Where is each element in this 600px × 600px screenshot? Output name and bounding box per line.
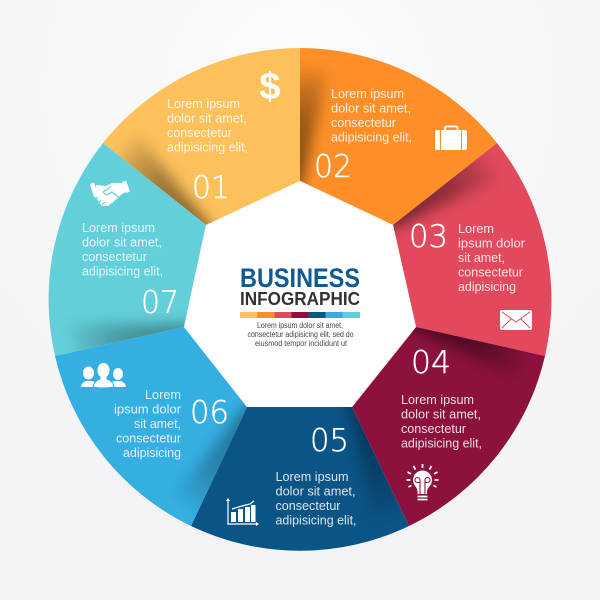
segment 03 [377,143,551,356]
text 05: dolor sit amet, [276,484,356,498]
numbers: 01 [192,170,230,206]
text 03: sit amet, [458,251,505,265]
text 04 [401,393,482,450]
text 07: adipisicing elit, [82,264,163,278]
icon: handshake [90,180,130,206]
numbers: 06 [190,395,229,431]
text 06 [114,388,181,460]
icon: briefcase [435,126,467,150]
text 02: dolor sit amet, [331,102,411,116]
colour stripe [240,312,360,318]
icon: people [81,363,126,388]
text 07: consectetur [82,250,147,264]
numbers: 04 [411,345,451,381]
segment 02 [285,48,497,225]
numbers: 07 [141,285,179,321]
segment 05 [191,407,409,551]
center description [248,321,354,348]
numbers: 03 [409,219,448,255]
numbers [141,149,451,459]
icon: light bulb [406,464,438,500]
text 01: consectetur [167,126,232,140]
icon: envelope [500,310,532,330]
center description: consectetur adipisicing elit, sed do [248,330,354,339]
segment 04 [352,310,545,526]
text 01: Lorem ipsum [167,97,240,111]
title [240,263,360,309]
text 06: Lorem [145,388,181,402]
text 07: dolor sit amet, [82,236,162,250]
text 02 [331,87,412,144]
text 03: adipisicing [458,280,516,294]
text 04: adipisicing elit, [401,436,482,450]
text 04: consectetur [401,422,466,436]
title: INFOGRAPHIC [240,288,360,309]
segment 06 [55,327,266,526]
text 05 [276,470,356,528]
text 07: Lorem ipsum [82,221,155,235]
text 06: consectetur [116,432,181,446]
text 01: adipisicing elit, [167,140,248,154]
title: BUSINESS [240,263,360,293]
icon: dollar: $ [259,66,281,108]
text 06: ipsum dolor [114,402,181,416]
text 04: Lorem ipsum [401,393,474,407]
segment 07 [49,143,206,366]
icon: bar chart [226,498,259,526]
text 07 [82,221,163,278]
numbers: 02 [314,149,352,185]
center heptagon [184,181,416,407]
segment 01 [103,48,300,243]
text 01: dolor sit amet, [167,112,247,126]
text 05: Lorem ipsum [276,470,348,484]
text 04: dolor sit amet, [401,408,481,422]
center description: eiusmod tempor incididunt ut [255,339,348,348]
text 02: Lorem ipsum [331,87,404,101]
text 02: consectetur [331,116,396,130]
text 06: sit amet, [134,417,181,431]
text 03 [458,222,525,294]
text 06: adipisicing [123,446,181,460]
numbers: 05 [310,423,349,459]
text 03: consectetur [458,266,523,280]
text 05: consectetur [276,499,340,513]
text 02: adipisicing elit, [331,130,412,144]
center description: Lorem ipsum dolor sit amet, [257,321,343,330]
text 01 [167,97,248,154]
text 05: adipisicing elit, [276,514,356,528]
text 03: Lorem [458,222,494,236]
text 03: ipsum dolor [458,236,525,250]
